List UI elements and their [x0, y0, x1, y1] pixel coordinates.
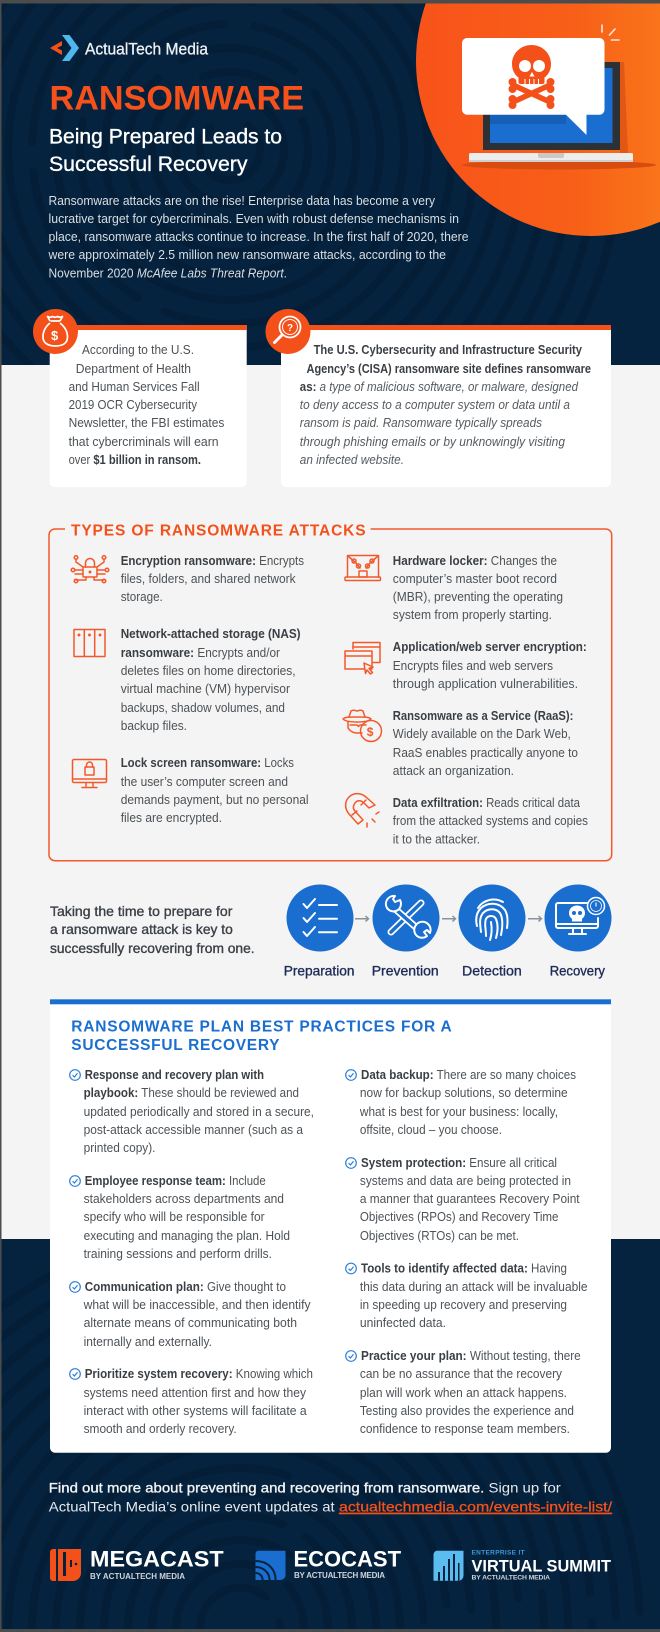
- heading: types of ransomware attacks: TYPES OF RANSOMWARE ATTACKS: [71, 522, 366, 540]
- practice: prioritize system recovery: Prioritize system recovery: Knowing which: [85, 1367, 313, 1381]
- text: data exfiltration: it to the attacker.: [393, 833, 480, 847]
- practice: response and recovery plan: [70, 1068, 314, 1155]
- practice: tools to identify affected data: Tools to identify affected data: Having: [361, 1262, 567, 1276]
- text: encryption ransomware: storage.: [121, 590, 163, 604]
- logo: Enterprise IT Virtual Summit: VIRTUAL SUMMIT: [472, 1557, 612, 1576]
- text: encryption ransomware: Encryption ransomware: Encrypts: [121, 554, 304, 568]
- text block: prepare statement: Taking the time to prepare for: [50, 903, 233, 919]
- practice: practice your plan: plan will work when an attack happens.: [360, 1386, 567, 1400]
- heading: best practices: SUCCESSFUL RECOVERY: [71, 1037, 280, 1054]
- call to action text: ActualTech Media’s online event updates at: [49, 1499, 335, 1515]
- text: application web server encryption: [393, 640, 587, 691]
- practice: employee response team: specify who will be responsible for: [84, 1210, 265, 1224]
- text: NAS ransomware: virtual machine (VM) hypervisor: [121, 682, 290, 696]
- text block: prepare statement: [50, 903, 255, 956]
- practice: prioritize system recovery: systems need attention first and how they: [84, 1386, 307, 1400]
- icon: lock screen monitor: [72, 760, 106, 788]
- text: ransomware as a service: RaaS enables practically anyone to: [393, 746, 578, 760]
- panel: FBI estimate card: Department of Health: [76, 362, 191, 376]
- practice: employee response team: stakeholders across departments and: [84, 1192, 284, 1206]
- text: application web server encryption: Encrypts files and web servers: [393, 659, 553, 673]
- panel: best practices: [50, 999, 611, 1453]
- panel: CISA definition card: Agency’s (CISA) ransomware site defines ransomware: [306, 362, 591, 376]
- heading: best practices: [71, 1019, 452, 1054]
- text: NAS ransomware: backups, shadow volumes, and: [121, 701, 285, 715]
- practice: practice your plan: Testing also provides the experience and: [360, 1404, 574, 1418]
- practice: communication plan: what will be inaccessible, and then identify: [83, 1298, 311, 1312]
- intro text block: Ransomware attacks are on the rise! Enterprise data has become a very: [48, 193, 436, 208]
- text: ransomware as a service: [393, 709, 578, 778]
- practice: data backup: offsite, cloud – you choose.: [360, 1123, 502, 1137]
- icon: hacker with dollar coin: $: [367, 725, 374, 739]
- text: data exfiltration: from the attacked systems and copies: [393, 814, 588, 828]
- practice: employee response team: executing and managing the plan. Hold: [84, 1229, 290, 1243]
- practice: prioritize system recovery: [70, 1367, 313, 1436]
- text: ransomware as a service: attack an organization.: [393, 764, 514, 778]
- text: encryption ransomware: [121, 554, 304, 604]
- text: data exfiltration: Data exfiltration: Reads critical data: [393, 796, 580, 810]
- title: RANSOMWARE: [50, 79, 304, 117]
- practice: response and recovery plan: printed copy).: [84, 1141, 156, 1155]
- practice: practice your plan: [346, 1349, 581, 1436]
- icon: encryption circuit lock: [71, 556, 109, 583]
- subtitle: Being Prepared Leads to: [49, 126, 282, 148]
- text: hardware locker: computer’s master boot record: [393, 572, 557, 586]
- text: hardware locker: system from properly starting.: [393, 608, 552, 622]
- icon: money bag: $: [51, 328, 59, 343]
- panel: FBI estimate card: that cybercriminals will earn: [69, 435, 219, 449]
- panel: CISA definition card: as: a type of malicious software, or malware, designed: [300, 380, 579, 394]
- practice: system protection: Objectives (RPOs) and Recovery Time: [360, 1210, 558, 1224]
- icon: magnifying glass with question mark: [266, 309, 310, 354]
- illustration: laptop with skull alert on orange circle: [416, 0, 660, 236]
- text: lock screen ransomware: demands payment, but no personal: [121, 793, 309, 807]
- practice: tools to identify affected data: this data during an attack will be invaluable: [360, 1280, 588, 1294]
- labels: stage names: [284, 963, 605, 979]
- practice: response and recovery plan: post-attack accessible manner (such as a: [84, 1123, 303, 1137]
- panel: FBI estimate card: Newsletter, the FBI estimates: [69, 416, 224, 430]
- intro text block: were approximately 2.5 million new ransomware attacks, according to the: [48, 247, 446, 262]
- text: NAS ransomware: ransomware: Encrypts and/or: [121, 646, 280, 660]
- practice: practice your plan: Practice your plan: Without testing, there: [361, 1349, 581, 1363]
- process flow: four stages: [284, 884, 612, 979]
- subtitle: Successful Recovery: [49, 153, 248, 176]
- intro text block: place, ransomware attacks continue to increase. In the first half of 2020, there: [48, 229, 468, 244]
- labels: stage names: Detection: [462, 963, 522, 979]
- panel: CISA definition card: ransom is paid. Ransomware typically spreads: [300, 416, 543, 430]
- logo: ActualTech Media: ActualTech Media: [85, 40, 208, 58]
- practice: system protection: System protection: Ensure all critical: [361, 1156, 557, 1170]
- logo: Enterprise IT Virtual Summit: ENTERPRISE IT: [472, 1550, 525, 1557]
- practice: system protection: systems and data are being protected in: [360, 1174, 571, 1188]
- text: ransomware as a service: Ransomware as a Service (RaaS):: [393, 709, 573, 723]
- icon: detection fingerprint: [458, 884, 526, 952]
- text: hardware locker: Hardware locker: Changes the: [393, 554, 557, 568]
- panel: CISA definition card: an infected website.: [300, 453, 404, 467]
- logo: Megacast: [50, 1547, 224, 1581]
- call to action text: Find out more about preventing and recovering from ransomware. Sign up for: [49, 1480, 561, 1496]
- text: lock screen ransomware: the user’s computer screen and: [121, 775, 288, 789]
- practice: data backup: [346, 1068, 576, 1137]
- icon: hacker with dollar coin: [343, 710, 382, 742]
- text: ransomware as a service: Widely available on the Dark Web,: [393, 727, 571, 741]
- practice: employee response team: training sessions and perform drills.: [84, 1247, 272, 1261]
- logo: Ecocast: ECOCAST: [294, 1547, 402, 1572]
- panel: FBI estimate card: 2019 OCR Cybersecurity: [69, 398, 198, 412]
- practice: tools to identify affected data: in speeding up recovery and preserving: [360, 1298, 567, 1312]
- practice: communication plan: alternate means of communicating both: [84, 1316, 297, 1330]
- intro text block: [48, 193, 469, 280]
- icon: magnet: [346, 794, 379, 827]
- text: lock screen ransomware: Lock screen ransomware: Locks: [121, 756, 294, 770]
- icon: prevention tools: [372, 884, 440, 952]
- text: hardware locker: [393, 554, 563, 622]
- practice: employee response team: Employee response team: Include: [85, 1174, 266, 1188]
- panel: FBI estimate card: According to the U.S.: [82, 343, 194, 357]
- panel: CISA definition card: through phishing emails or by unknowingly visiting: [300, 435, 565, 449]
- panel: CISA definition card: The U.S. Cybersecurity and Infrastructure Security: [314, 343, 582, 357]
- icon: NAS storage: [74, 630, 105, 656]
- labels: stage names: Recovery: [550, 963, 605, 979]
- text: encryption ransomware: files, folders, and shared network: [121, 572, 296, 586]
- text: NAS ransomware: Network-attached storage (NAS): [121, 627, 301, 641]
- panel: CISA definition card: to deny access to a computer system or data until a: [300, 398, 570, 412]
- intro text block: November 2020 McAfee Labs Threat Report.: [48, 266, 287, 280]
- icon: hardware locker: [345, 556, 380, 580]
- text: NAS ransomware: [121, 627, 301, 733]
- logo: Ecocast: BY ACTUALTECH MEDIA: [294, 1571, 385, 1580]
- practice: system protection: a manner that guarantees Recovery Point: [360, 1192, 580, 1206]
- text: NAS ransomware: backup files.: [121, 719, 187, 733]
- panel: FBI estimate card: and Human Services Fall: [69, 380, 200, 394]
- practice: communication plan: [70, 1280, 311, 1349]
- practice: communication plan: Communication plan: Give thought to: [85, 1280, 286, 1294]
- practice: response and recovery plan: updated periodically and stored in a secure,: [84, 1105, 314, 1119]
- logo: Megacast: BY ACTUALTECH MEDIA: [90, 1572, 185, 1581]
- practice: response and recovery plan: Response and recovery plan with: [85, 1068, 264, 1082]
- practice: response and recovery plan: playbook: These should be reviewed and: [84, 1086, 299, 1100]
- practice: system protection: Objectives (RTOs) can be met.: [360, 1229, 519, 1243]
- practice: system protection: [346, 1156, 580, 1243]
- icon: skull and crossbones: [508, 45, 554, 109]
- logo: Ecocast: [256, 1547, 402, 1580]
- practice: practice your plan: confidence to response team members.: [360, 1422, 570, 1436]
- logo: ActualTech Media: [50, 35, 208, 61]
- text: NAS ransomware: deletes files on home directories,: [121, 664, 296, 678]
- icon: magnifying glass with question mark: ?: [287, 323, 293, 334]
- call to action text: actualtechmedia.com/events-invite-list/: [339, 1499, 612, 1515]
- text: lock screen ransomware: [121, 756, 309, 825]
- icon: application web server windows: [345, 642, 380, 674]
- intro text block: lucrative target for cybercriminals. Even with robust defense mechanisms in: [48, 211, 459, 226]
- icon: recovery monitor with skull: [544, 884, 612, 952]
- text block: prepare statement: a ransomware attack is key to: [50, 921, 233, 937]
- panel: FBI estimate card: over $1 billion in ransom.: [69, 453, 201, 467]
- practice: data backup: now for backup solutions, so determine: [360, 1086, 568, 1100]
- logo: Enterprise IT Virtual Summit: BY ACTUALTECH MEDIA: [472, 1575, 550, 1582]
- icon: money bag: [33, 309, 78, 354]
- panel: CISA definition card: [266, 309, 611, 487]
- text: data exfiltration: [393, 796, 588, 847]
- labels: stage names: Preparation: [284, 963, 354, 979]
- call to action text: [49, 1480, 612, 1515]
- text: lock screen ransomware: files are encrypted.: [121, 811, 222, 825]
- labels: stage names: Prevention: [372, 963, 439, 979]
- panel: FBI estimate card: [33, 309, 247, 487]
- practice: prioritize system recovery: interact with other systems will facilitate a: [84, 1404, 307, 1418]
- arrows between stages: [355, 916, 542, 921]
- practice: data backup: Data backup: There are so many choices: [361, 1068, 576, 1082]
- practice: tools to identify affected data: [346, 1262, 588, 1330]
- practice: communication plan: internally and externally.: [84, 1335, 212, 1349]
- heading: best practices: RANSOMWARE PLAN BEST PRACTICES FOR A: [71, 1019, 452, 1036]
- logo: Megacast: MEGACAST: [90, 1547, 224, 1572]
- panel: types of ransomware attacks: [49, 522, 612, 861]
- text: hardware locker: (MBR), preventing the operating: [393, 590, 563, 604]
- text: application web server encryption: Application/web server encryption:: [393, 640, 587, 654]
- subtitle: [49, 126, 282, 176]
- logo: Enterprise IT Virtual Summit: [433, 1550, 612, 1582]
- text block: prepare statement: successfully recovering from one.: [50, 940, 255, 956]
- icon: preparation checklist: [286, 884, 354, 952]
- practice: prioritize system recovery: smooth and orderly recovery.: [84, 1422, 237, 1436]
- practice: employee response team: [70, 1174, 290, 1261]
- practice: practice your plan: can be no assurance that the recovery: [360, 1367, 563, 1381]
- practice: tools to identify affected data: uninfected data.: [360, 1316, 446, 1330]
- practice: data backup: what is best for your business: locally,: [359, 1105, 558, 1119]
- text: application web server encryption: through application vulnerabilities.: [393, 677, 578, 691]
